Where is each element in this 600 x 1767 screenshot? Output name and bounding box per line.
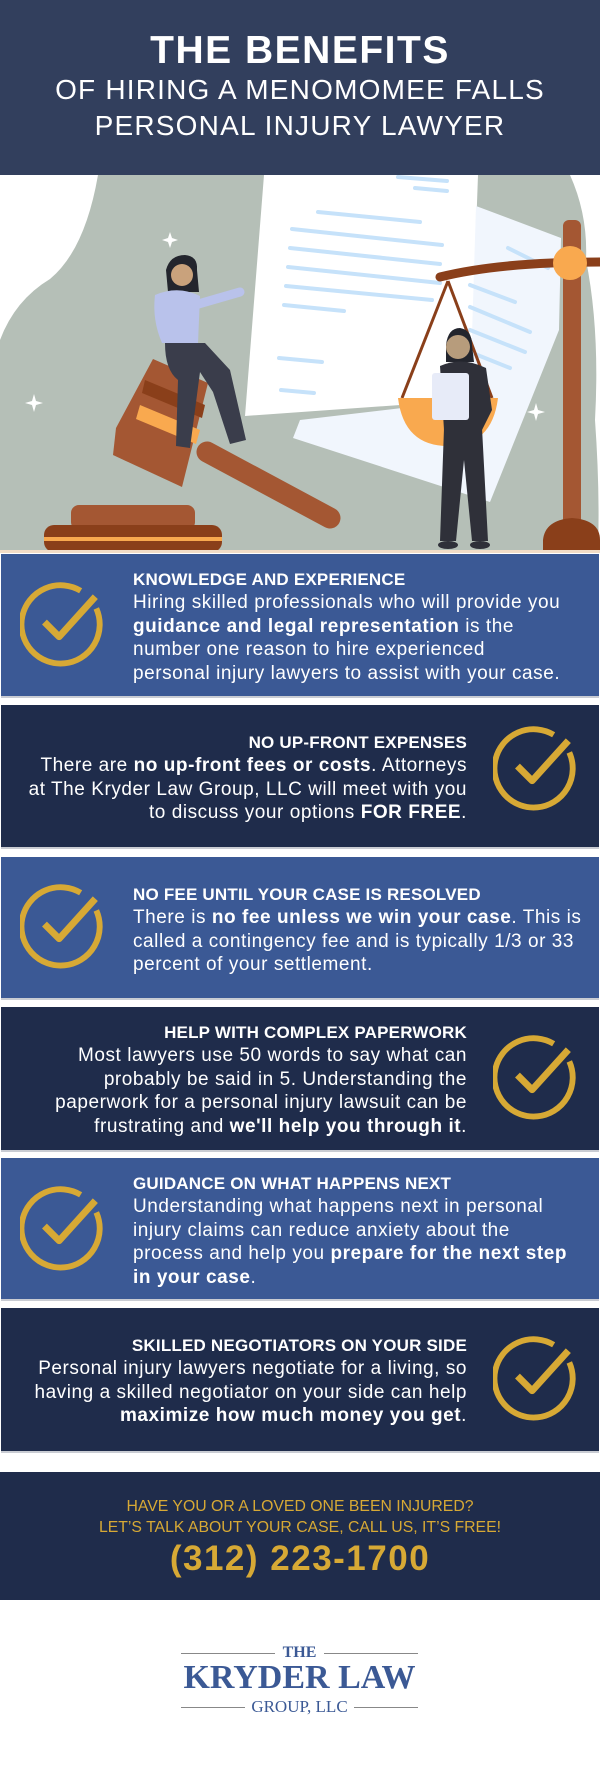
icon: check circle [20, 884, 103, 968]
CTA text: LET’S TALK ABOUT YOUR CASE, CALL US, IT’S FREE! [99, 1519, 501, 1536]
scale [563, 220, 581, 530]
panel: no fee until resolved [1, 857, 599, 1000]
text: personal injury lawyers to assist with your case. [133, 662, 560, 684]
text [133, 885, 581, 975]
CTA text [99, 1498, 501, 1536]
icon: check circle [20, 1186, 103, 1270]
text: process and help you prepare for the next step [133, 1243, 567, 1264]
text: injury claims can reduce anxiety about the [133, 1220, 510, 1240]
phone number: (312) 223-1700 [170, 1539, 430, 1578]
panel: no up-front expenses [1, 705, 599, 849]
text: maximize how much money you get. [120, 1405, 467, 1426]
gavel head [113, 359, 208, 487]
icon: check circle [493, 1336, 576, 1420]
illustration: gavel, lawyers, scales [0, 175, 600, 553]
logo [181, 1644, 418, 1716]
gavel base [71, 505, 195, 530]
header [0, 0, 600, 175]
text: There is no fee unless we win your case. This is [133, 907, 581, 928]
text: percent of your settlement. [133, 954, 373, 975]
text: frustrating and we'll help you through it. [94, 1116, 467, 1136]
text: in your case. [133, 1266, 256, 1288]
panel: guidance on what happens next [1, 1158, 599, 1301]
text: NO UP-FRONT EXPENSES [249, 733, 467, 752]
logo: GROUP, LLC [251, 1697, 348, 1716]
text: Personal injury lawyers negotiate for a living, so [38, 1358, 467, 1379]
panel: complex paperwork [1, 1007, 599, 1152]
text: Hiring skilled professionals who will provide you [133, 592, 560, 613]
logo: KRYDER LAW [183, 1659, 416, 1696]
text [29, 733, 467, 823]
text [133, 1174, 567, 1288]
panel: knowledge and experience [1, 554, 599, 698]
text: Most lawyers use 50 words to say what can [78, 1045, 467, 1066]
subtitle [55, 74, 545, 141]
text: called a contingency fee and is typically 1/3 or 33 [133, 930, 574, 952]
text: NO FEE UNTIL YOUR CASE IS RESOLVED [133, 885, 481, 904]
logo: THE [283, 1644, 316, 1661]
text: GUIDANCE ON WHAT HAPPENS NEXT [133, 1174, 451, 1193]
text [55, 1023, 467, 1136]
text: paperwork for a personal injury lawsuit can be [55, 1092, 467, 1113]
text: SKILLED NEGOTIATORS ON YOUR SIDE [132, 1336, 467, 1355]
text: HELP WITH COMPLEX PAPERWORK [164, 1023, 467, 1042]
text: having a skilled negotiator on your side can help [34, 1382, 467, 1402]
text [133, 570, 560, 684]
text: There are no up-front fees or costs. Attorneys [40, 755, 467, 776]
CTA [0, 1472, 600, 1600]
CTA text: HAVE YOU OR A LOVED ONE BEEN INJURED? [126, 1498, 474, 1515]
woman sitting [168, 259, 196, 287]
icon: check circle [493, 1035, 576, 1120]
text: guidance and legal representation is the [133, 616, 514, 636]
text: KNOWLEDGE AND EXPERIENCE [133, 570, 405, 589]
icon: check circle [493, 726, 576, 810]
text: to discuss your options FOR FREE. [149, 802, 467, 823]
title: THE BENEFITS [150, 29, 450, 72]
standing woman [446, 328, 474, 362]
icon: check circle [20, 582, 103, 666]
text: at The Kryder Law Group, LLC will meet with you [29, 778, 467, 800]
text: number one reason to hire experienced [133, 639, 485, 660]
subtitle: OF HIRING A MENOMOMEE FALLS [55, 74, 545, 105]
panel: skilled negotiators [1, 1308, 599, 1453]
text: Understanding what happens next in personal [133, 1196, 543, 1217]
gavel handle [207, 452, 330, 518]
text [34, 1336, 467, 1426]
text: probably be said in 5. Understanding the [104, 1068, 467, 1090]
subtitle: PERSONAL INJURY LAWYER [95, 110, 505, 141]
